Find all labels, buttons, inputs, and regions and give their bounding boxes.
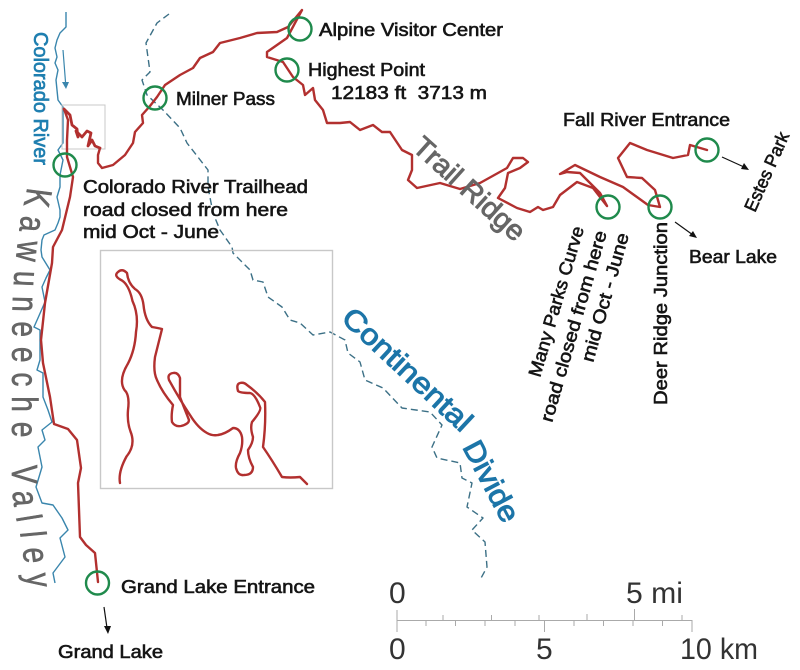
label: Bear Lake: Bear Lake (689, 247, 777, 267)
label: Colorado River Trailhead note: mid Oct - June (83, 222, 219, 242)
river: Colorado River line (34, 12, 68, 583)
label: Kawuneeche Valley: Kawuneeche Valley (11, 189, 52, 587)
label: Continental Divide: Continental (335, 302, 478, 438)
label: Milner Pass: Milner Pass (176, 89, 275, 109)
label: Grand Lake Entrance: Grand Lake Entrance (121, 577, 315, 597)
arrow: river flow direction (62, 50, 69, 89)
label: Colorado River Trailhead note: road closed from here (83, 200, 288, 220)
arrow: to Grand Lake (104, 607, 111, 634)
scale label: miles zero: 0 (389, 577, 406, 610)
scale label: km zero: 0 (389, 633, 406, 666)
label: Trail Ridge: Trail Ridge (407, 130, 532, 247)
label: Alpine Visitor Center: Alpine Visitor Center (319, 20, 503, 40)
label: Colorado River: Colorado River (29, 32, 51, 165)
scale label: km five: 5 (536, 633, 553, 666)
arrow: to Estes Park (722, 157, 749, 170)
waypoint markers (54, 18, 718, 594)
continental divide dashed line (142, 14, 487, 580)
label: Estes Park: Estes Park (740, 128, 794, 215)
arrow: to Bear Lake (675, 222, 697, 238)
label: Fall River Entrance: Fall River Entrance (563, 110, 730, 130)
inset panel: enlarged road switchbacks (100, 250, 332, 488)
label: Continental Divide (335, 302, 525, 528)
label: elevation: 12183 ft 3713 m (331, 83, 487, 103)
main road: Trail Ridge Road (41, 109, 98, 582)
label: Deer Ridge Junction: Deer Ridge Junction (651, 222, 671, 405)
label: Many Parks Curve note: mid Oct - June (578, 231, 633, 364)
label: Many Parks Curve note: Many Parks Curve (525, 224, 588, 379)
inset road (116, 270, 307, 484)
scale label: 10 km: 10 km (680, 633, 758, 666)
label: Continental Divide: Divide (456, 435, 525, 528)
main road: west side climbing to Alpine Visitor Center (98, 10, 707, 212)
label: Grand Lake: Grand Lake (58, 642, 163, 662)
label: Many Parks Curve note: road closed from here (537, 228, 611, 424)
scale label: 5 mi: 5 mi (626, 577, 683, 610)
inset locator box (62, 105, 105, 149)
label: Colorado River Trailhead note (83, 177, 308, 242)
label: Colorado River Trailhead note: Colorado River Trailhead (83, 177, 308, 197)
scale bar (389, 577, 758, 666)
main road: switchback section inside locator box (64, 109, 100, 148)
label: Many Parks Curve note (525, 224, 633, 424)
label: Highest Point: Highest Point (308, 60, 425, 80)
